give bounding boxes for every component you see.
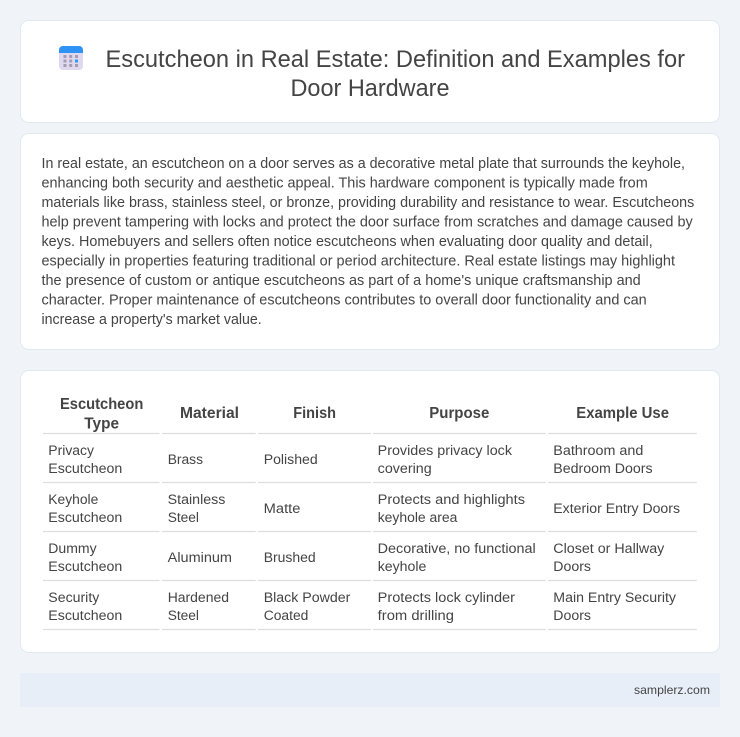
text block: description paragraph: character. Proper maintenance of escutcheons contributes to overall door functionality and can — [42, 292, 647, 308]
text block: description paragraph — [42, 156, 694, 328]
table row: privacy escutcheon: Brass — [168, 452, 203, 468]
text block: description paragraph: help prevent tampering with locks and protect the door surface from scratches and damage caused by — [42, 214, 693, 230]
table row: dummy escutcheon: Aluminum — [168, 550, 232, 566]
text block: description paragraph: materials like brass, stainless steel, or bronze, providing durability and resistance to wear. Escutcheons — [42, 195, 694, 211]
table header row: Example Use — [576, 405, 669, 422]
panel: escutcheon table — [20, 370, 720, 652]
table row: privacy escutcheon: Escutcheon — [48, 461, 122, 477]
table row: security escutcheon: Black Powder — [264, 590, 351, 606]
table row: dummy escutcheon: Decorative, no functional — [378, 541, 536, 557]
text block: description paragraph: In real estate, an escutcheon on a door serves as a decorative metal plate that surrounds the keyhole, — [42, 156, 685, 172]
table header row: Type — [84, 415, 119, 432]
table row: privacy escutcheon: Provides privacy lock — [378, 443, 513, 459]
table row: security escutcheon: Steel — [168, 608, 199, 624]
table row: security escutcheon: Hardened — [168, 590, 229, 606]
table row: keyhole escutcheon — [48, 492, 680, 526]
table row: keyhole escutcheon: Escutcheon — [48, 510, 122, 526]
table row: security escutcheon: Main Entry Security — [553, 590, 677, 606]
table header row: Finish — [293, 405, 336, 422]
table row: keyhole escutcheon: Matte — [264, 501, 301, 517]
table row: keyhole escutcheon: Stainless — [168, 492, 225, 508]
title — [106, 46, 685, 102]
title: Escutcheon in Real Estate: Definition and Examples for — [106, 46, 685, 73]
table header row: Purpose — [429, 405, 490, 422]
table row: dummy escutcheon: Closet or Hallway — [553, 541, 665, 557]
text block: description paragraph: increase a property's market value. — [42, 312, 262, 328]
text block: description paragraph: the presence of custom or antique escutcheons as part of a home's unique craftsmanship and — [42, 273, 641, 289]
table row: privacy escutcheon: Polished — [264, 452, 318, 468]
panel: description — [20, 134, 720, 350]
table row: security escutcheon: from drilling — [378, 608, 454, 624]
icon: calendar grid — [59, 46, 83, 70]
table row: privacy escutcheon: Bedroom Doors — [553, 461, 653, 477]
table row: dummy escutcheon: Dummy — [48, 541, 97, 557]
text block: description paragraph: enhancing both security and aesthetic appeal. This hardware component is typically made from — [42, 175, 648, 191]
table row: keyhole escutcheon: Protects and highlights — [378, 492, 525, 508]
table row: security escutcheon: Coated — [264, 608, 308, 624]
table row: keyhole escutcheon: keyhole area — [378, 510, 457, 526]
table row: security escutcheon: Doors — [553, 608, 591, 624]
table row: keyhole escutcheon: Steel — [168, 510, 199, 526]
table row: dummy escutcheon — [48, 541, 665, 575]
table row: privacy escutcheon: Bathroom and — [553, 443, 643, 459]
footer bar — [20, 673, 720, 707]
table row: dummy escutcheon: keyhole — [378, 559, 427, 575]
table row: security escutcheon: Escutcheon — [48, 608, 122, 624]
table row: privacy escutcheon — [48, 443, 653, 477]
footer credit: samplerz.com — [634, 683, 710, 697]
text block: description paragraph: especially in properties featuring traditional or period architecture. Real estate listings may highlight — [42, 253, 675, 269]
table header row — [60, 396, 669, 432]
table row: dummy escutcheon: Doors — [553, 559, 591, 575]
text block: description paragraph: keys. Homebuyers and sellers often notice escutcheons when evaluating door quality and detail, — [42, 234, 653, 250]
table row: keyhole escutcheon: Exterior Entry Doors — [553, 501, 680, 517]
panel: title header — [20, 20, 720, 122]
table row: privacy escutcheon: covering — [378, 461, 432, 477]
table row: privacy escutcheon: Privacy — [48, 443, 95, 459]
table row: security escutcheon: Protects lock cylinder — [378, 590, 515, 606]
table row: dummy escutcheon: Brushed — [264, 550, 316, 566]
table row: keyhole escutcheon: Keyhole — [48, 492, 98, 508]
title: Door Hardware — [290, 75, 450, 102]
table header row: Escutcheon — [60, 396, 143, 413]
table row: security escutcheon — [48, 590, 677, 624]
table header row: Material — [180, 405, 239, 422]
table row: dummy escutcheon: Escutcheon — [48, 559, 122, 575]
table row: security escutcheon: Security — [48, 590, 100, 606]
